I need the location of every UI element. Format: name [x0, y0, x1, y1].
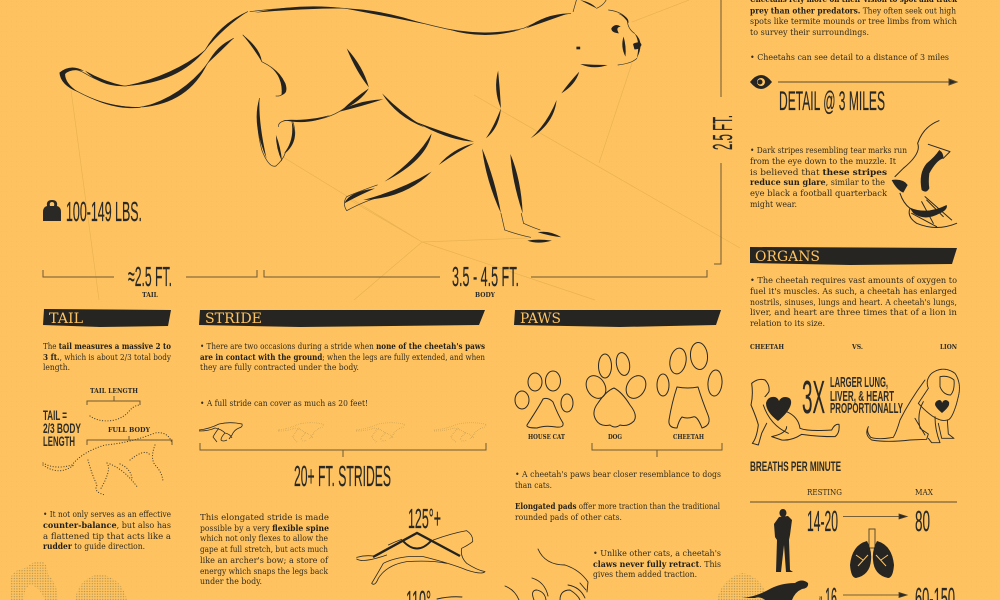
panel: organs: MAX — [915, 488, 934, 498]
panel: stride: This elongated stride is made — [200, 513, 329, 523]
panel: organs: • The cheetah requires vast amounts of oxygen to — [750, 276, 957, 286]
panel: organs — [742, 247, 959, 600]
panel: tail: 3 ft., which is about 2/3 total body — [43, 353, 171, 363]
panel: eyes: from the eye down to the muzzle. It — [750, 157, 897, 167]
dimension: body length — [264, 261, 707, 299]
panel: paws: Elongated pads offer more traction than the traditional — [515, 502, 720, 512]
panel: paws: HOUSE CAT — [528, 434, 565, 441]
panel: organs: RESTING — [807, 488, 842, 498]
spine flex diagram: 125°+ — [408, 503, 441, 534]
panel: stride: energy which snaps the legs back — [200, 567, 329, 577]
panel: organs: CHEETAH — [750, 344, 784, 351]
paw prints — [515, 342, 723, 428]
panel: eyes: might wear. — [750, 200, 797, 210]
arrow: vision distance — [778, 79, 957, 85]
arrow: cheetah breaths — [843, 592, 907, 598]
panel: eyes: eye black a football quarterback — [750, 189, 888, 199]
panel: stride: which not only flexes to allow the — [200, 534, 328, 544]
icon: kettlebell weight — [43, 200, 61, 221]
weight — [43, 196, 142, 227]
panel: stride: • A full stride can cover as much as 20 feet! — [200, 399, 368, 409]
panel: organs: relation to its size. — [750, 319, 825, 329]
panel: stride: 20+ FT. STRIDES — [294, 461, 391, 493]
panel: stride: possible by a very flexible spine — [200, 524, 329, 534]
panel: organs: VS. — [851, 344, 863, 351]
panel: paws: • Unlike other cats, a cheetah's — [593, 549, 721, 559]
panel: organs: nostrils, sinuses, lungs and heart. A cheetah's lungs, — [750, 298, 957, 308]
panel: tail: TAIL = — [43, 407, 67, 423]
heading: stride: STRIDE — [205, 311, 262, 327]
panel: eyes: reduce sun glare, similar to the — [750, 178, 885, 188]
panel: paws: • A cheetah's paws bear closer resemblance to dogs — [515, 470, 721, 480]
panel: organs: BREATHS PER MINUTE — [750, 458, 841, 474]
panel: paws — [505, 310, 723, 600]
heading: tail: TAIL — [49, 311, 83, 327]
dotted cheetah — [43, 433, 172, 495]
panel: eyes: to survey their surroundings. — [750, 28, 869, 38]
dimension: tail length — [43, 261, 257, 299]
spine flex diagram — [357, 503, 485, 584]
panel: tail: length. — [43, 363, 70, 373]
heading: paws — [514, 310, 721, 327]
dimension: height: 2.5 FT. — [707, 115, 738, 150]
dimension: height — [707, 0, 738, 264]
panel: tail: rudder to guide direction. — [43, 542, 145, 552]
dimension: tail length: TAIL — [142, 292, 159, 299]
dimension: body length: BODY — [475, 292, 496, 299]
panel: eyes — [750, 0, 958, 227]
panel: eyes: • Dark stripes resembling tear marks run — [750, 146, 907, 156]
cheetah main illustration — [59, 0, 642, 243]
panel: paws: claws never fully retract. This — [593, 560, 721, 570]
panel: tail: • It not only serves as an effective — [43, 510, 171, 520]
panel: organs: LARGER LUNG, — [830, 374, 888, 391]
panel: paws: gives them added traction. — [593, 570, 697, 580]
panel: paws: CHEETAH — [673, 434, 704, 441]
panel: paws: than cats. — [515, 481, 552, 491]
panel: stride — [199, 310, 486, 600]
panel: organs: 80 — [915, 506, 930, 538]
panel: organs: ≈ — [818, 596, 825, 600]
panel: tail: counter-balance, but also has — [43, 521, 171, 531]
text: 100-149 LBS. — [66, 196, 142, 227]
panel: stride: they are fully contracted under the body. — [200, 363, 359, 373]
panel: organs: LIVER, & HEART — [830, 388, 894, 405]
panel: organs: liver, and heart are three times that of a lion in — [750, 308, 957, 318]
heading: tail — [43, 309, 171, 327]
heading: paws: PAWS — [520, 311, 561, 327]
panel: stride: like an archer's bow; a store of — [200, 556, 329, 566]
icon: cheetah face — [892, 121, 957, 227]
panel: organs: fuel it's muscles. As such, a cheetah has enlarged — [750, 287, 957, 297]
panel: eyes: prey than other predators. They often seek out high — [750, 6, 956, 16]
heading: stride — [199, 310, 485, 327]
heading: organs — [750, 247, 957, 265]
panel: eyes: • Cheetahs can see detail to a distance of 3 miles — [750, 53, 949, 63]
panel: paws: rounded pads of other cats. — [515, 513, 622, 523]
panel: tail — [43, 309, 172, 552]
panel: tail: FULL BODY — [108, 427, 151, 434]
panel: tail: The tail measures a massive 2 to — [43, 342, 171, 352]
dimension: tail length: ≈2.5 FT. — [128, 261, 172, 292]
panel: eyes: spots like termite mounds or tree limbs from which — [750, 17, 957, 27]
panel: tail: a flattened tip that acts like a — [43, 532, 171, 542]
dimension: body length: 3.5 - 4.5 FT. — [452, 261, 519, 292]
panel: tail: 2/3 BODY — [43, 420, 81, 436]
icon: running cheetah silhouette — [742, 580, 808, 600]
panel: stride: gape at full stretch, but acts much — [200, 545, 328, 555]
panel: organs: PROPORTIONALLY — [830, 400, 903, 417]
halftone blobs — [10, 561, 768, 600]
icon: sitting lion with heart — [867, 369, 959, 443]
panel: organs: LION — [940, 344, 957, 351]
stride sequence — [199, 423, 486, 442]
panel: stride: under the body. — [200, 577, 262, 587]
panel: stride: • There are two occasions during a stride when none of the cheetah's paws — [200, 342, 485, 352]
panel: organs: 3X — [802, 371, 825, 423]
panel: stride: are in contact with the ground; when the legs are fully extended, and when — [200, 353, 485, 363]
icon: lungs — [850, 529, 894, 578]
panel: tail: TAIL LENGTH — [90, 388, 138, 395]
panel: tail: LENGTH — [43, 433, 75, 449]
panel: paws: DOG — [608, 434, 622, 441]
panel: eyes: is believed that these stripes — [750, 168, 887, 178]
icon: eye — [750, 75, 772, 89]
icon: claws — [505, 549, 588, 600]
icon: sitting cheetah with heart — [751, 379, 839, 445]
icon: human silhouette — [774, 509, 793, 572]
arrow: human breaths — [843, 514, 907, 519]
heading: organs: ORGANS — [755, 249, 820, 265]
panel: organs: 14-20 — [807, 506, 838, 538]
